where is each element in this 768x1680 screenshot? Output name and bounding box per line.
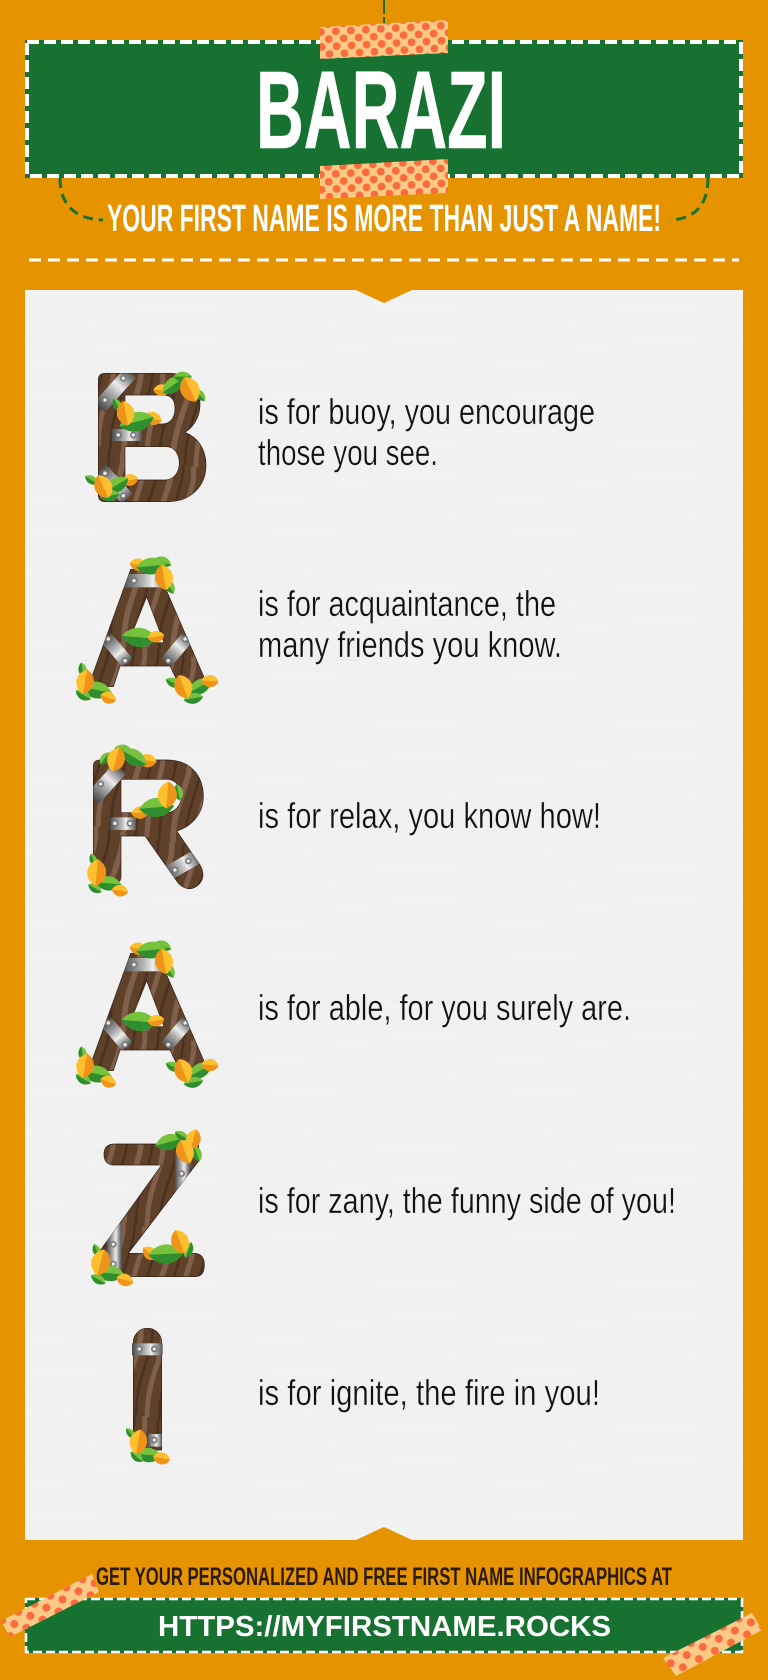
text: I line: is for ignite, the fire in you! — [258, 1372, 600, 1413]
dashed divider — [29, 258, 739, 262]
header banner — [25, 40, 743, 178]
letter A (second) — [73, 938, 219, 1090]
letter I — [124, 1328, 171, 1466]
text: B line: is for buoy, you encourage — [258, 391, 595, 432]
text: B line: those you see. — [258, 432, 438, 473]
title: BARAZI — [256, 49, 506, 172]
text: A line — [258, 583, 562, 665]
panel: letters — [25, 290, 743, 1540]
connector curves — [60, 178, 708, 220]
tape: top — [320, 20, 448, 59]
tape: footer left — [1, 1574, 99, 1637]
text: A line: many friends you know. — [258, 624, 562, 665]
text: second A line: is for able, for you surely are. — [258, 987, 631, 1028]
footer url: HTTPS://MYFIRSTNAME.ROCKS — [158, 1611, 611, 1643]
hanging dashed line — [383, 0, 385, 24]
text: Z line: is for zany, the funny side of you! — [258, 1180, 676, 1221]
text: A line: is for acquaintance, the — [258, 583, 556, 624]
text: R line: is for relax, you know how! — [258, 795, 601, 836]
letter B — [83, 368, 208, 504]
tape: bottom of banner — [320, 159, 448, 199]
text: B line — [258, 391, 595, 473]
letter Z — [88, 1127, 204, 1288]
letter R — [86, 743, 203, 898]
tape: footer right — [663, 1613, 762, 1676]
footer banner — [25, 1598, 743, 1653]
letter A (first) — [73, 554, 219, 706]
